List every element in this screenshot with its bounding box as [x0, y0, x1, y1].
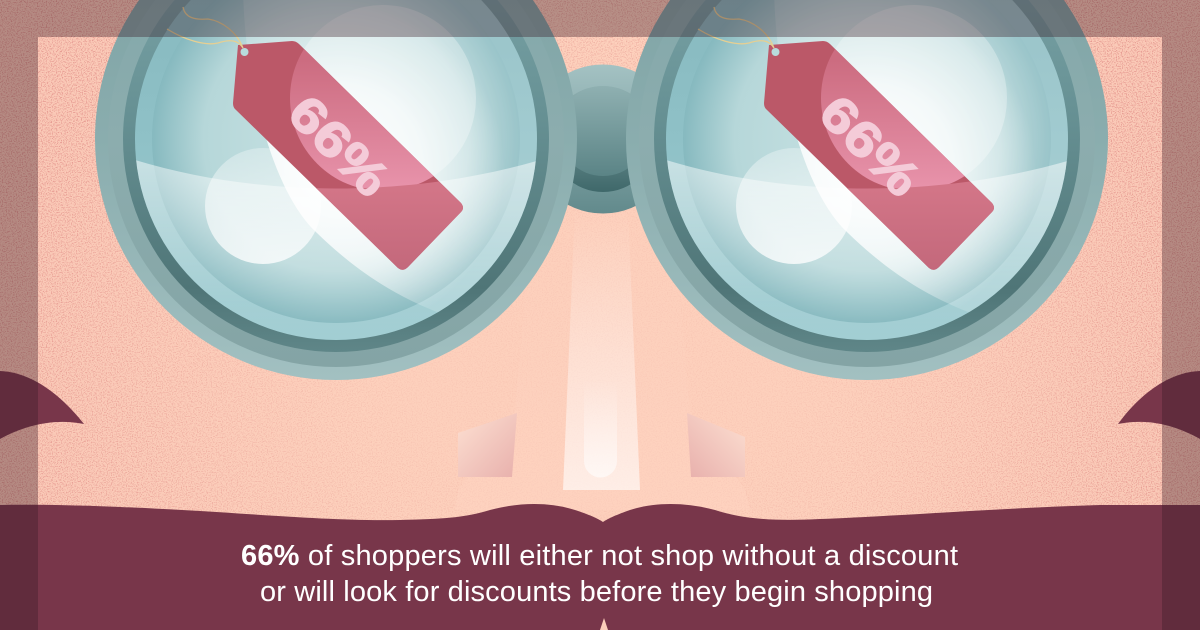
caption — [241, 540, 958, 608]
nose — [455, 210, 750, 510]
lens rings — [95, 0, 577, 380]
tag string — [698, 7, 774, 48]
lens reflections — [136, 0, 537, 312]
moustache banner — [0, 504, 1200, 630]
tag hole — [772, 48, 780, 56]
left nostril shadow — [458, 413, 517, 477]
left binocular lens — [95, 0, 580, 380]
right binocular lens — [626, 0, 1111, 380]
nose highlight strip — [563, 210, 640, 490]
right eyebrow — [1118, 371, 1200, 439]
price tag — [166, 7, 463, 270]
nose side shading — [455, 240, 750, 510]
binocular bridge — [528, 64, 678, 214]
lens reflections — [667, 0, 1068, 312]
lens rings — [626, 0, 1108, 380]
tag text: 66%: 66% — [808, 84, 932, 208]
right nostril shadow — [687, 413, 745, 477]
tag text: 66%: 66% — [277, 84, 401, 208]
tag string — [167, 7, 243, 48]
tag hole — [240, 48, 248, 56]
price tag — [698, 7, 994, 270]
chin tick — [600, 618, 608, 630]
nose highlight pill — [584, 380, 617, 478]
caption line 1: 66% of shoppers will either not shop without a discount — [241, 540, 958, 572]
caption line 2: or will look for discounts before they begin shopping — [260, 576, 933, 608]
left eyebrow — [0, 371, 84, 439]
